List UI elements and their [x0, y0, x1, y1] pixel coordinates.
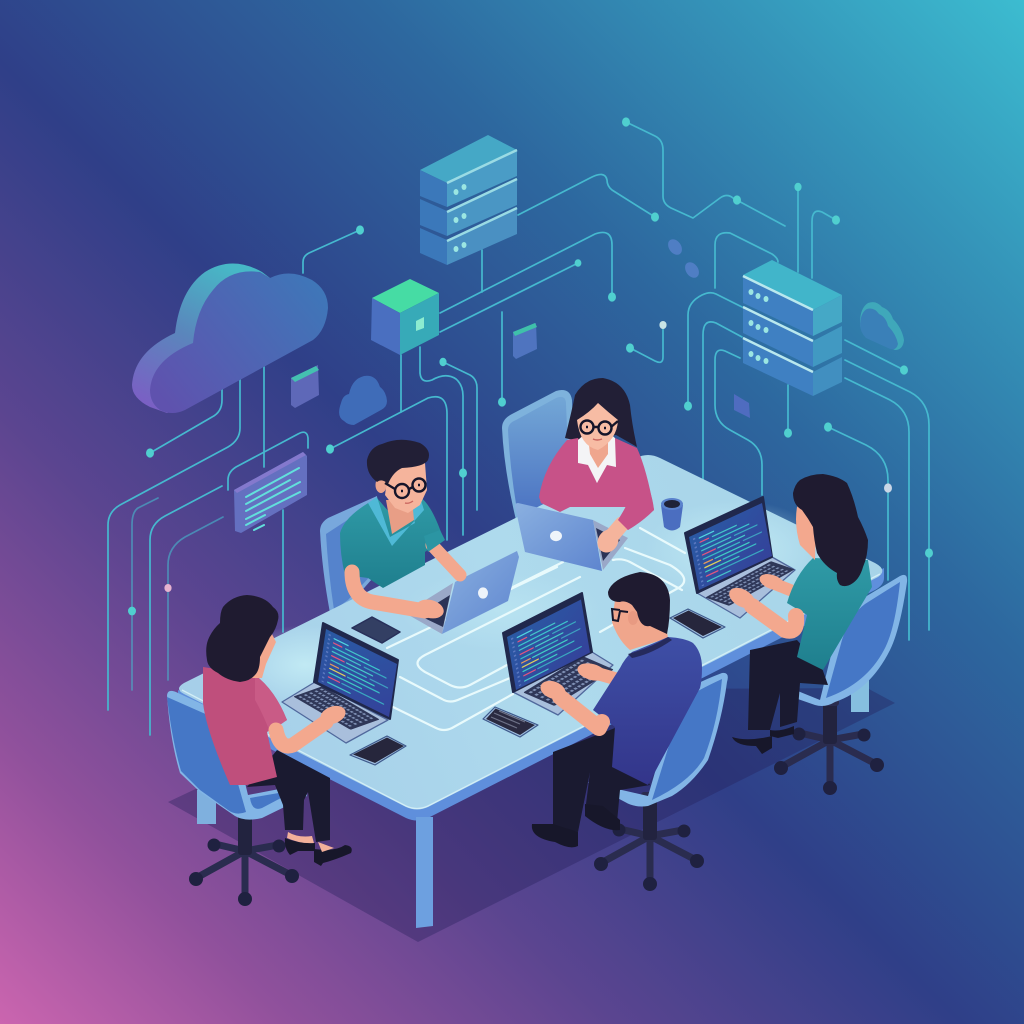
- ear: front man: [628, 611, 638, 625]
- hands and arms: back woman: [593, 470, 654, 556]
- icon: small cloud right: [860, 302, 904, 350]
- chair: left woman: [167, 691, 307, 906]
- chair: back woman: [502, 390, 575, 520]
- icon: small cube left: [291, 365, 319, 408]
- table legs: back: [197, 680, 869, 824]
- icon: capsule pills: [665, 237, 702, 280]
- chair: right woman: [766, 575, 907, 795]
- shoes: right woman: [732, 726, 794, 754]
- icon: small cube right: [734, 394, 750, 418]
- server stack: right: [743, 260, 842, 396]
- hand: front man far: [592, 672, 620, 680]
- neck: front man: [612, 600, 668, 650]
- shirt: left woman: [203, 667, 287, 785]
- hair: left man: [367, 440, 429, 484]
- shirt: right woman: [787, 558, 872, 670]
- person: left woman: [203, 595, 352, 866]
- circuit lines: [108, 122, 929, 735]
- glasses: front man: [612, 609, 628, 621]
- neck: right woman: [796, 500, 816, 560]
- phone: three: [483, 707, 538, 737]
- coffee cup: [661, 498, 683, 530]
- laptop: back woman (lid facing viewer): [515, 503, 628, 571]
- icon: green cube: [371, 279, 439, 355]
- glasses: back woman: [580, 420, 618, 434]
- hair: right woman: [793, 474, 868, 586]
- laptop: left man (lid facing viewer): [405, 551, 519, 634]
- laptop: left woman: [282, 623, 398, 743]
- hair: front man: [608, 572, 670, 634]
- glasses: left man: [385, 478, 426, 498]
- trousers: left woman: [247, 750, 330, 842]
- shirt: front man: [593, 637, 702, 785]
- tablet: four: [670, 609, 725, 638]
- chair: front man: [587, 673, 728, 891]
- person: front man: [532, 572, 702, 847]
- trousers: front man: [553, 728, 650, 832]
- server stack: top centre: [420, 135, 517, 265]
- shoes: left woman: [285, 838, 352, 866]
- tablet: two: [350, 736, 406, 765]
- person: right woman: [726, 474, 872, 754]
- neck: left woman: [250, 630, 276, 678]
- icon: small cloud left: [339, 376, 387, 425]
- arm: front man: [560, 697, 602, 728]
- person: left man torso and head: [340, 440, 443, 588]
- arm: left woman: [276, 722, 326, 746]
- chair: back left man: [320, 496, 380, 613]
- tablet: one: [352, 617, 400, 643]
- hands and arms: left man: [352, 530, 460, 621]
- table circuit lines: [387, 528, 685, 730]
- trousers: right woman: [748, 640, 828, 730]
- icon: small cube centre: [513, 323, 537, 359]
- hair: left woman: [206, 595, 278, 682]
- table leg: front: [416, 817, 433, 928]
- circuit node dots: [128, 117, 933, 615]
- table: [178, 455, 884, 928]
- laptop: front man: [503, 593, 614, 715]
- person: back woman torso and head: [539, 378, 654, 530]
- text card panel: [234, 452, 307, 533]
- hand: right woman far: [775, 584, 795, 592]
- arm: right woman: [752, 606, 796, 631]
- laptop: right woman: [685, 497, 795, 618]
- floor shadow: [168, 688, 895, 942]
- shoes: front man: [532, 804, 620, 847]
- icon: large cloud: [132, 264, 328, 413]
